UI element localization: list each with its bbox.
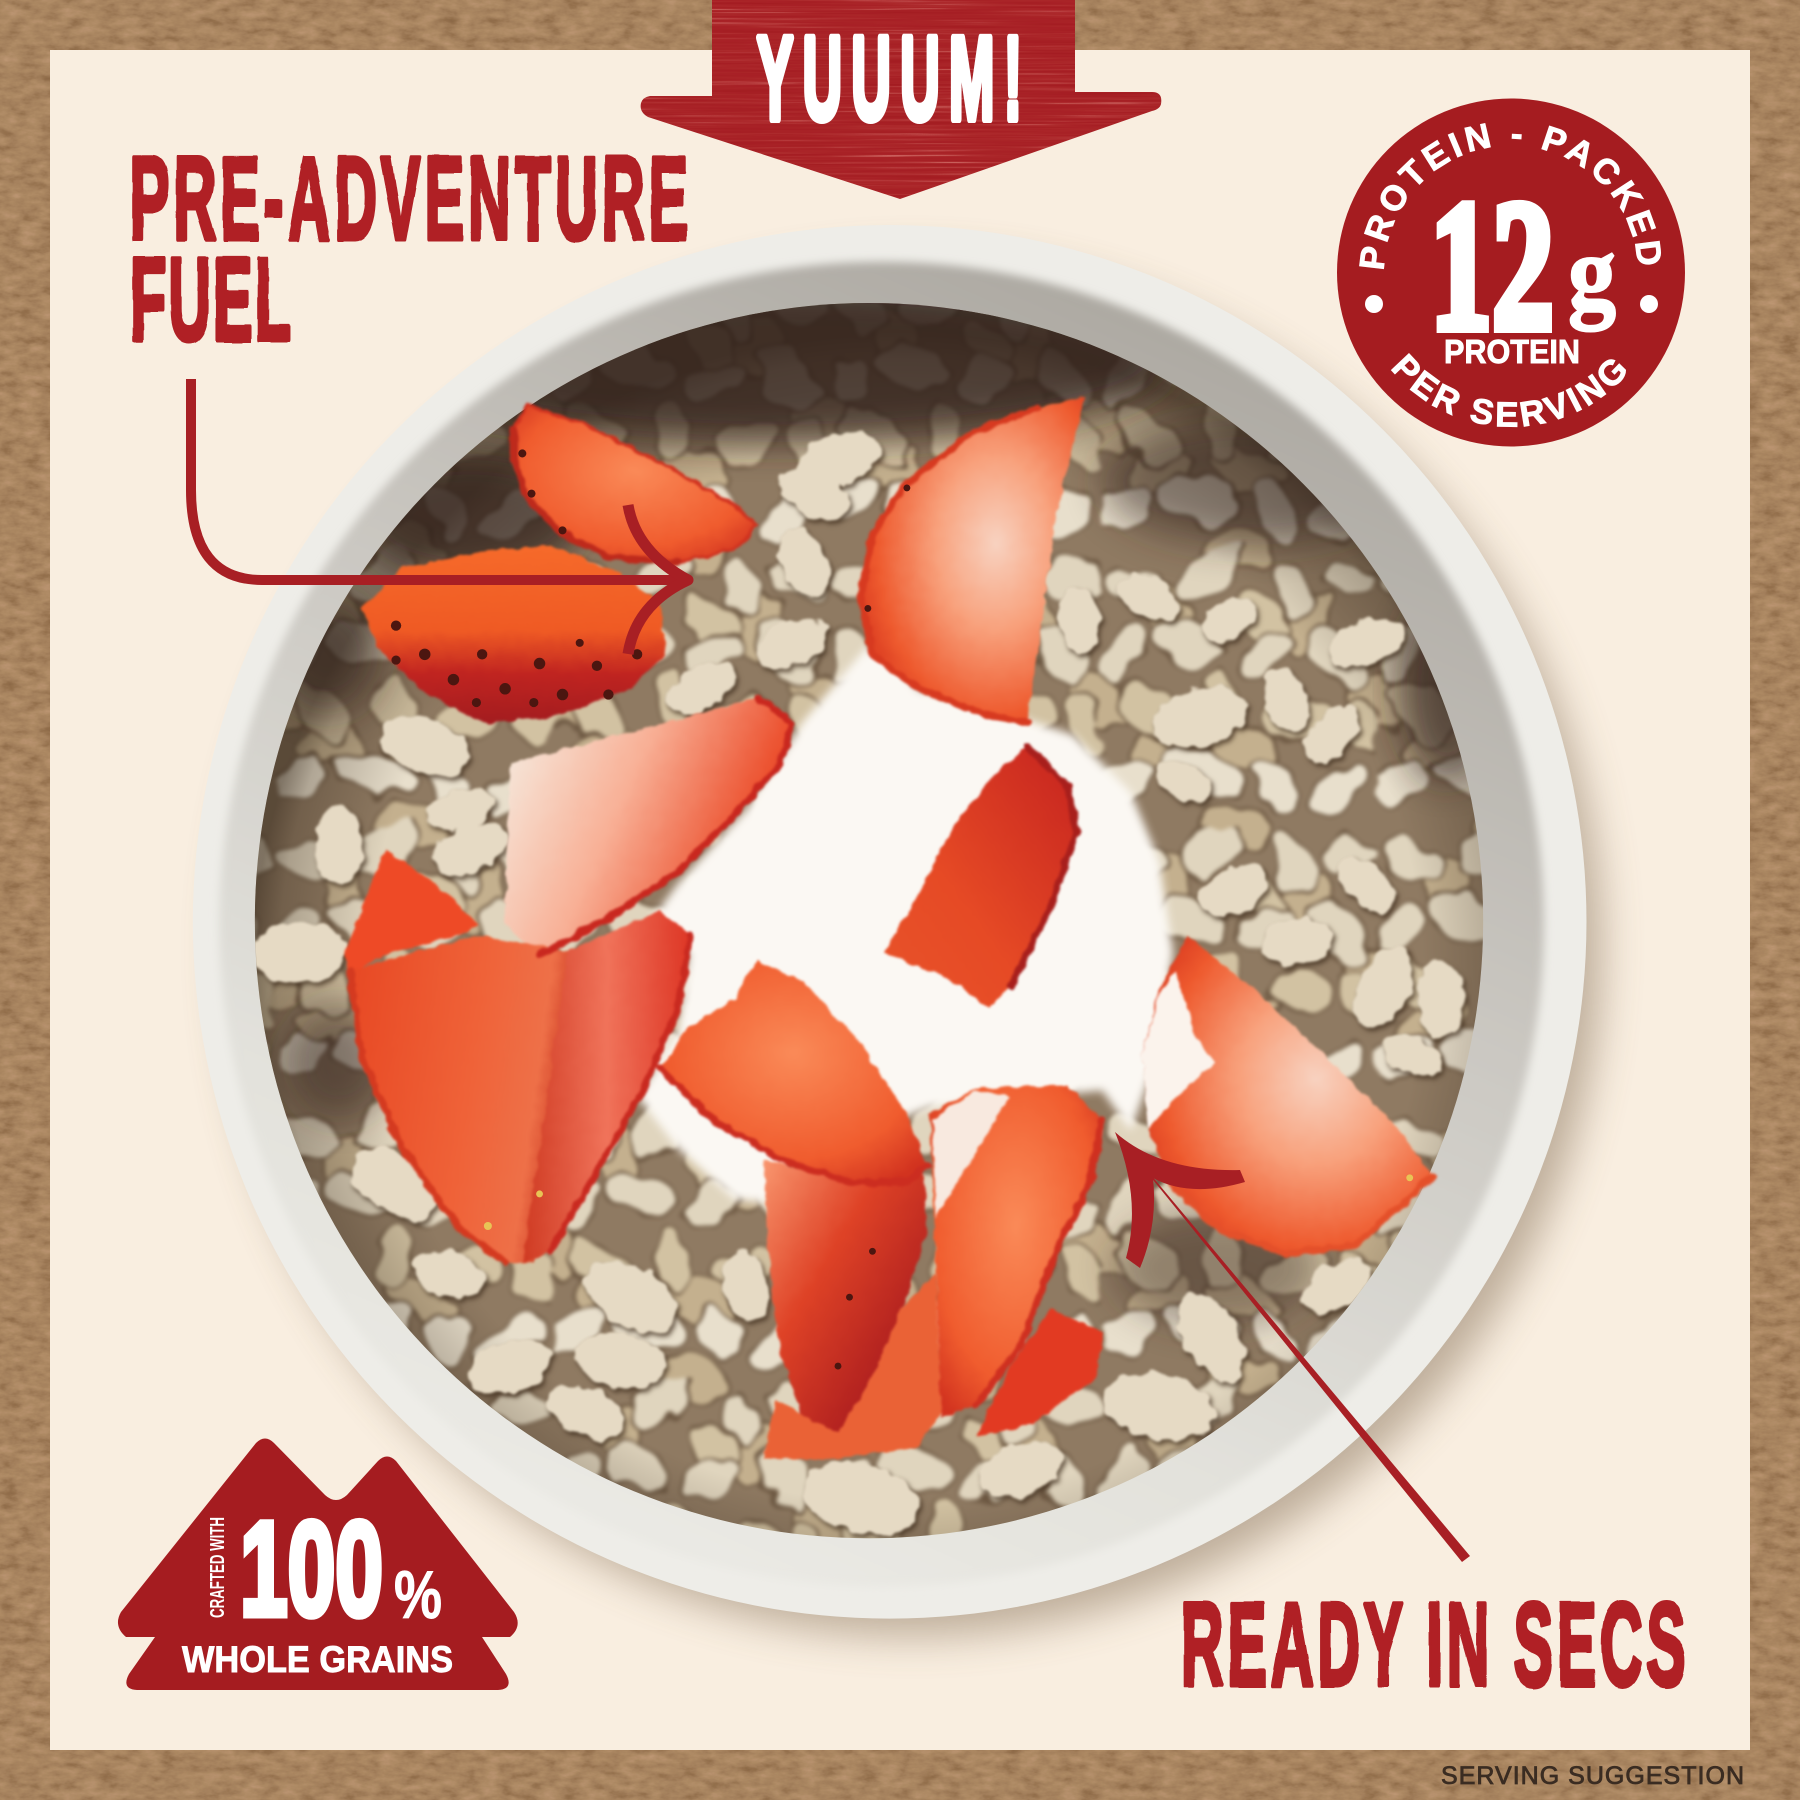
badge 12g: 12 xyxy=(1430,163,1554,369)
strawberry rims xyxy=(350,408,1433,1406)
strawberry: left small slice xyxy=(344,849,479,973)
strawberry: back bottom slices xyxy=(763,1274,941,1460)
oat flakes light xyxy=(247,420,1468,1547)
banner text: YUUUM! xyxy=(757,14,1022,145)
badge: protein packed: g xyxy=(1568,214,1616,331)
strawberry: right slice xyxy=(1142,936,1433,1254)
yogurt smear on right slice xyxy=(1142,970,1215,1131)
banner: YUUUM! arrow xyxy=(630,0,1170,210)
strawberry: centre lower slice xyxy=(660,960,928,1182)
dark oat zones xyxy=(276,281,1492,1326)
heading: pre-adventure fuel xyxy=(130,133,688,365)
strawberry: small dark slice on yogurt xyxy=(884,746,1077,1008)
strawberry seeds xyxy=(391,449,910,1370)
bowl rim xyxy=(193,225,1586,1619)
strawberry: lower column slice xyxy=(763,1159,928,1433)
strawberry: centre bottom slice xyxy=(930,1085,1102,1418)
strawberry: left large partner slice xyxy=(522,910,691,1263)
heading: ready in secs: READY IN SECS xyxy=(1181,1579,1686,1710)
strawberry: mid-left pale slice xyxy=(505,697,792,955)
heading: pre-adventure fuel: FUEL xyxy=(130,234,291,365)
crafted with: CRAFTED WITH xyxy=(207,1517,229,1618)
heading: pre-adventure fuel: PRE-ADVENTURE xyxy=(130,133,688,264)
arrow: ready in secs pointer xyxy=(1115,1132,1470,1562)
strawberries xyxy=(344,396,1433,1460)
strawberry: large lower slice xyxy=(362,545,666,723)
oats xyxy=(254,303,1484,1538)
arrow: pre-adventure fuel pointer xyxy=(191,379,688,654)
yogurt xyxy=(637,634,1173,1203)
percent: % xyxy=(394,1557,442,1633)
strawberry: left large slice xyxy=(350,936,568,1263)
pale tip on centre bottom slice xyxy=(932,1091,1010,1217)
badge label: PROTEIN xyxy=(1444,333,1580,370)
badge arc text top: PROTEIN - PACKED xyxy=(1359,123,1662,270)
whole grains: WHOLE GRAINS xyxy=(182,1639,453,1680)
badge dots xyxy=(1365,295,1658,313)
badge: protein packed xyxy=(1337,98,1685,446)
100: 100 xyxy=(240,1495,383,1644)
strawberry: top centre slice xyxy=(861,396,1085,723)
badge arc text bottom: PER SERVING xyxy=(1390,353,1626,428)
photo: oatmeal bowl with strawberries and yogurt xyxy=(172,225,1601,1636)
note: serving suggestion: SERVING SUGGESTION xyxy=(1441,1762,1744,1790)
badge: 100% whole grains mountain xyxy=(118,1438,518,1690)
strawberry: top left half slice xyxy=(513,405,758,563)
